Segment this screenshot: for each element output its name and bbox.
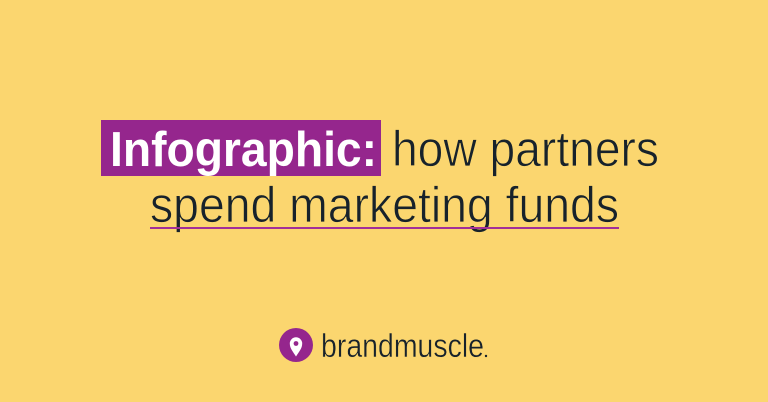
heading line one: how partners xyxy=(392,121,659,177)
heading line two: spend marketing funds xyxy=(150,177,619,233)
heading underline xyxy=(150,227,619,229)
highlighted heading word: Infographic: xyxy=(110,123,377,177)
registered mark dot xyxy=(485,355,487,357)
icon: location pin xyxy=(279,328,313,362)
title xyxy=(101,120,659,233)
logo wordmark: brandmuscle xyxy=(321,327,484,364)
brandmuscle logo xyxy=(279,327,487,364)
